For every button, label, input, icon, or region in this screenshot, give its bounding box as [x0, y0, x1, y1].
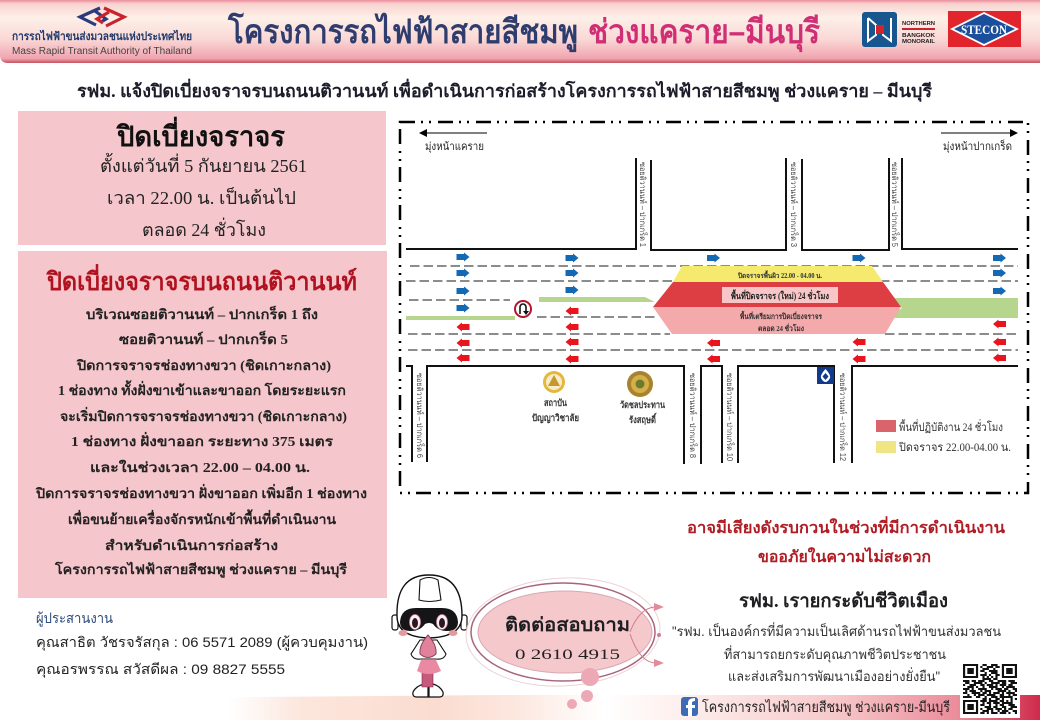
closure description text	[35, 305, 367, 578]
skirt	[417, 660, 441, 674]
closure description text: 1 ช่องทาง ฝั่งขาออก ระยะทาง 375 เมตร	[71, 431, 334, 449]
vision statement: และส่งเสริมการพัฒนาเมืองอย่างยั่งยืน"	[728, 667, 940, 684]
subtitle: รฟม. แจ้งปิดเบี่ยงจราจรบนถนนติวานนท์ เพื่อดำเนินการก่อสร้างโครงการรถไฟฟ้าสายสีชมพู ช่วงแคราย – มีนบุรี	[77, 78, 933, 103]
closure zone	[653, 266, 901, 334]
logo: Northern Bangkok Monorail	[862, 12, 936, 47]
closure start date: ตั้งแต่วันที่ 5 กันยายน 2561	[100, 153, 307, 176]
vision statement: ที่สามารถยกระดับคุณภาพชีวิตประชาชน	[724, 645, 946, 663]
coordinators contact	[36, 610, 368, 678]
road map diagram	[400, 122, 1028, 493]
legend: ปิดจราจร 22.00-04.00 น.	[898, 441, 1011, 454]
vision statement	[672, 622, 1001, 684]
landmark: Panyapiwat Institute	[532, 371, 579, 424]
zone label: red: พื้นที่ปิดจราจร (ใหม่) 24 ชั่วโมง	[731, 289, 829, 301]
side road labels: ซอยติวานนท์ – ปากเกร็ด 3	[789, 162, 799, 247]
coordinators contact: ผู้ประสานงาน	[36, 610, 113, 627]
red traffic arrows	[456, 306, 1006, 364]
direction: to Pak Kret: มุ่งหน้าปากเกร็ด	[943, 139, 1012, 153]
vision statement: "รฟม. เป็นองค์กรที่มีความเป็นเลิศด้านรถไฟฟ้าขนส่งมวลชน	[672, 622, 1001, 639]
direction: to Pak Kret	[941, 129, 1018, 153]
side road labels: ซอยติวานนท์ – ปากเกร็ด 10	[725, 373, 735, 462]
logo: Stecon	[948, 11, 1021, 47]
contact oval	[463, 573, 664, 709]
green median	[406, 297, 1018, 320]
closure description text: บริเวณซอยติวานนท์ – ปากเกร็ด 1 ถึง	[86, 305, 318, 322]
icon: Bangkok Bank	[817, 367, 834, 384]
zone label: yellow: ปิดจราจรพื้นผิว 22.00 - 04.00 น.	[737, 269, 822, 280]
legend: พื้นที่ปฏิบัติงาน 24 ชั่วโมง	[899, 419, 1003, 434]
QR code	[960, 661, 1020, 718]
head and helmet	[397, 575, 462, 638]
closure description text: สำหรับดำเนินการก่อสร้าง	[105, 538, 278, 553]
noise notice: อาจมีเสียงดังรบกวนในช่วงที่มีการดำเนินงาน	[687, 516, 1005, 537]
legend	[876, 419, 1011, 454]
side road labels: ซอยติวานนท์ – ปากเกร็ด 12	[838, 373, 848, 462]
contact heading: ติดต่อสอบถาม	[505, 615, 630, 636]
mascot	[392, 575, 467, 697]
logo: MRTA	[12, 8, 192, 57]
side road labels: ซอยติวานนท์ – ปากเกร็ด 1	[638, 162, 648, 247]
panel: closure details	[18, 251, 387, 598]
icon: U-turn sign	[515, 301, 531, 317]
side road labels	[415, 162, 900, 462]
connector arrows	[630, 603, 664, 667]
landmark: Wat Chonprathan: วัดชลประทาน	[620, 399, 665, 411]
closure description text: และในช่วงเวลา 22.00 – 04.00 น.	[90, 459, 310, 475]
coordinators contact: คุณสาธิต วัชรจรัสกุล : 06 5571 2089 (ผู้ควบคุมงาน)	[36, 634, 368, 651]
closure description text: โครงการรถไฟฟ้าสายสีชมพู ช่วงแคราย – มีนบุรี	[54, 560, 348, 578]
side road labels: ซอยติวานนท์ – ปากเกร็ด 8	[688, 373, 698, 458]
closure description text: เพื่อขนย้ายเครื่องจักรหนักเข้าพื้นที่ดำเนินงาน	[68, 509, 337, 527]
cheeks	[398, 630, 408, 636]
eyes	[410, 614, 420, 630]
logo: Stecon: STECON	[961, 22, 1008, 37]
decorative bubbles	[567, 668, 599, 709]
landmark: Wat Chonprathan: รังสฤษดิ์	[629, 412, 657, 426]
heading: Tiwanon road closure: ปิดเบี่ยงจราจรบนถนนติวานนท์	[46, 264, 357, 296]
direction: to Khae Rai: มุ่งหน้าแคราย	[425, 141, 484, 153]
facebook link	[681, 697, 950, 716]
closure description text: จะเริ่มปิดการจราจรช่องทางขวา (ชิดเกาะกลาง)	[60, 406, 347, 424]
noise notice: ขออภัยในความไม่สะดวก	[758, 547, 931, 566]
title accent: ช่วงแคราย–มีนบุรี	[588, 13, 820, 53]
icon: Facebook	[681, 697, 698, 716]
closure duration: ตลอด 24 ชั่วโมง	[142, 217, 266, 240]
noise notice	[687, 516, 1005, 566]
heading: closure: ปิดเบี่ยงจราจร	[115, 116, 285, 153]
side road labels: ซอยติวานนท์ – ปากเกร็ด 6	[415, 373, 425, 458]
zone label: pink	[740, 310, 823, 333]
feet	[413, 684, 443, 697]
logo: MRTA: การรถไฟฟ้าขนส่งมวลชนแห่งประเทศไทย	[12, 29, 192, 43]
facebook link: โครงการรถไฟฟ้าสายสีชมพู ช่วงแคราย-มีนบุรี	[702, 698, 950, 716]
zone label: red	[722, 287, 838, 303]
footer band	[0, 695, 1040, 720]
legs	[422, 672, 433, 687]
closure start time: เวลา 22.00 น. เป็นต้นไป	[107, 186, 296, 208]
panel: closure date	[18, 111, 386, 245]
header banner	[0, 0, 1040, 63]
ears	[392, 615, 398, 630]
arms	[411, 640, 446, 659]
zone label: pink: พื้นที่เตรียมการปิดเบี่ยงจราจร	[740, 310, 823, 321]
landmark: Panyapiwat Institute: ปัญญาวิชาลัย	[532, 412, 579, 424]
direction: to Khae Rai	[419, 129, 487, 153]
logo: MRTA: Mass Rapid Transit Authority of Thailand	[12, 46, 192, 57]
logo: Northern Bangkok Monorail: NORTHERN	[902, 21, 935, 27]
side road labels: ซอยติวานนท์ – ปากเกร็ด 5	[890, 162, 900, 247]
closure description text: 1 ช่องทาง ทั้งฝั่งขาเข้าและขาออก โดยระยะแรก	[58, 380, 346, 398]
logo: Northern Bangkok Monorail: BANGKOK	[902, 33, 935, 39]
visor	[400, 608, 458, 631]
road edges	[406, 158, 1018, 464]
logo: Northern Bangkok Monorail: MONORAIL	[902, 39, 936, 45]
road lane lines	[406, 266, 1018, 350]
closure description text: ปิดการจราจรช่องทางขวา ฝั่งขาออก เพิ่มอีก 1 ช่องทาง	[35, 483, 367, 501]
zone label: pink: ตลอด 24 ชั่วโมง	[758, 322, 804, 333]
title: โครงการรถไฟฟ้าสายสีชมพู	[227, 12, 578, 53]
contact phone: 0 2610 4915	[515, 647, 620, 663]
map border	[400, 122, 1028, 493]
praying hands	[420, 635, 436, 658]
coordinators contact: คุณอรพรรณ สวัสดีผล : 09 8827 5555	[36, 661, 285, 678]
landmark: Wat Chonprathan	[620, 371, 665, 426]
MRTA slogan: รฟม. เรายกระดับชีวิตเมือง	[739, 590, 948, 612]
closure description text: ซอยติวานนท์ – ปากเกร็ด 5	[119, 330, 288, 347]
blue traffic arrows	[456, 252, 1006, 312]
landmark: Panyapiwat Institute: สถาบัน	[544, 398, 567, 409]
closure description text: ปิดการจราจรช่องทางขวา (ชิดเกาะกลาง)	[76, 358, 331, 373]
